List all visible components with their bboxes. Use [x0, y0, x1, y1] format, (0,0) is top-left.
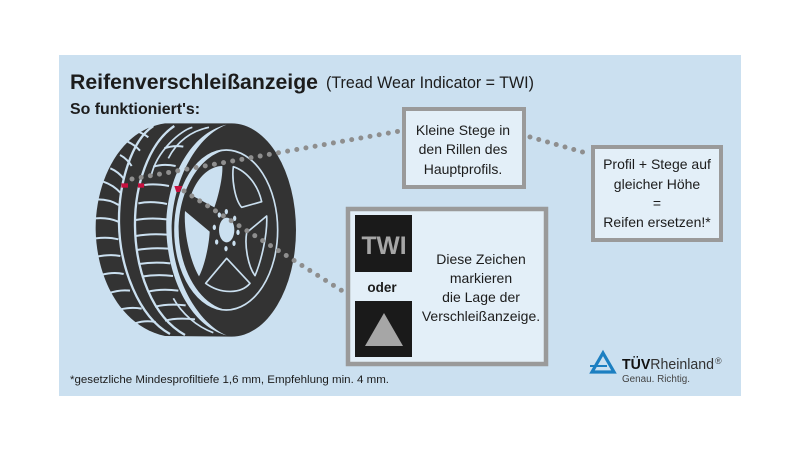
illustration: tyre and wheel: [96, 123, 296, 337]
title: Reifenverschleißanzeige: [70, 71, 318, 94]
dotted connector: top box to right box: [530, 137, 586, 153]
subtitle: Tread Wear Indicator: (Tread Wear Indicator = TWI): [326, 74, 534, 92]
text: sign description: [422, 251, 540, 324]
label: oder: oder: [367, 280, 397, 295]
text box: Kleine Stege: Hauptprofils.: [424, 161, 502, 177]
text: sign description: markieren: [450, 270, 512, 286]
logo wordmark: TÜVRheinland: [622, 356, 714, 373]
text: sign description: die Lage der: [442, 289, 520, 305]
text box: Reifen ersetzen: [593, 147, 721, 240]
registered mark: ®: [715, 356, 722, 366]
text box: Reifen ersetzen: Profil + Stege auf: [603, 156, 711, 172]
heading: So funktioniert's: So funktioniert's:: [70, 101, 200, 118]
tread lines: [96, 131, 195, 323]
tyre sidewall highlight: [166, 125, 227, 335]
filled windows: [191, 166, 222, 207]
dotted connector: tyre to sign box: [184, 191, 344, 292]
text box: Reifen ersetzen: gleicher Höhe: [614, 176, 700, 192]
text box: Kleine Stege: Kleine Stege in: [416, 122, 510, 138]
icon: TWI sign: [355, 215, 412, 272]
icon: logo triangle: [590, 353, 614, 372]
text: sign description: Diese Zeichen: [436, 251, 526, 267]
logo tagline: Genau. Richtig.: [622, 374, 690, 385]
box: tyre markings: [348, 209, 546, 364]
panel: background: [59, 55, 741, 396]
tyre grooves: [119, 126, 213, 335]
outlined windows: [206, 167, 267, 291]
text box: Kleine Stege: [404, 109, 524, 187]
red wear markers: [121, 183, 182, 192]
wheel hub: [213, 209, 240, 251]
text box: Kleine Stege: den Rillen des: [419, 141, 507, 157]
dotted connector: tyre to top box: [132, 131, 400, 179]
rim rings: [175, 150, 278, 310]
logo: TÜV Rheinland: [590, 353, 722, 385]
tyre silhouette: [96, 123, 296, 337]
footnote: *gesetzliche Mindesprofiltiefe 1,6 mm, Empfehlung min. 4 mm.: [70, 374, 389, 386]
icon: TWI sign: TWI: [361, 233, 407, 260]
icon: triangle sign: [355, 301, 412, 357]
text: sign description: Verschleißanzeige.: [422, 308, 540, 324]
text box: Reifen ersetzen: Reifen ersetzen!*: [603, 214, 711, 230]
text box: Reifen ersetzen: =: [653, 195, 661, 211]
